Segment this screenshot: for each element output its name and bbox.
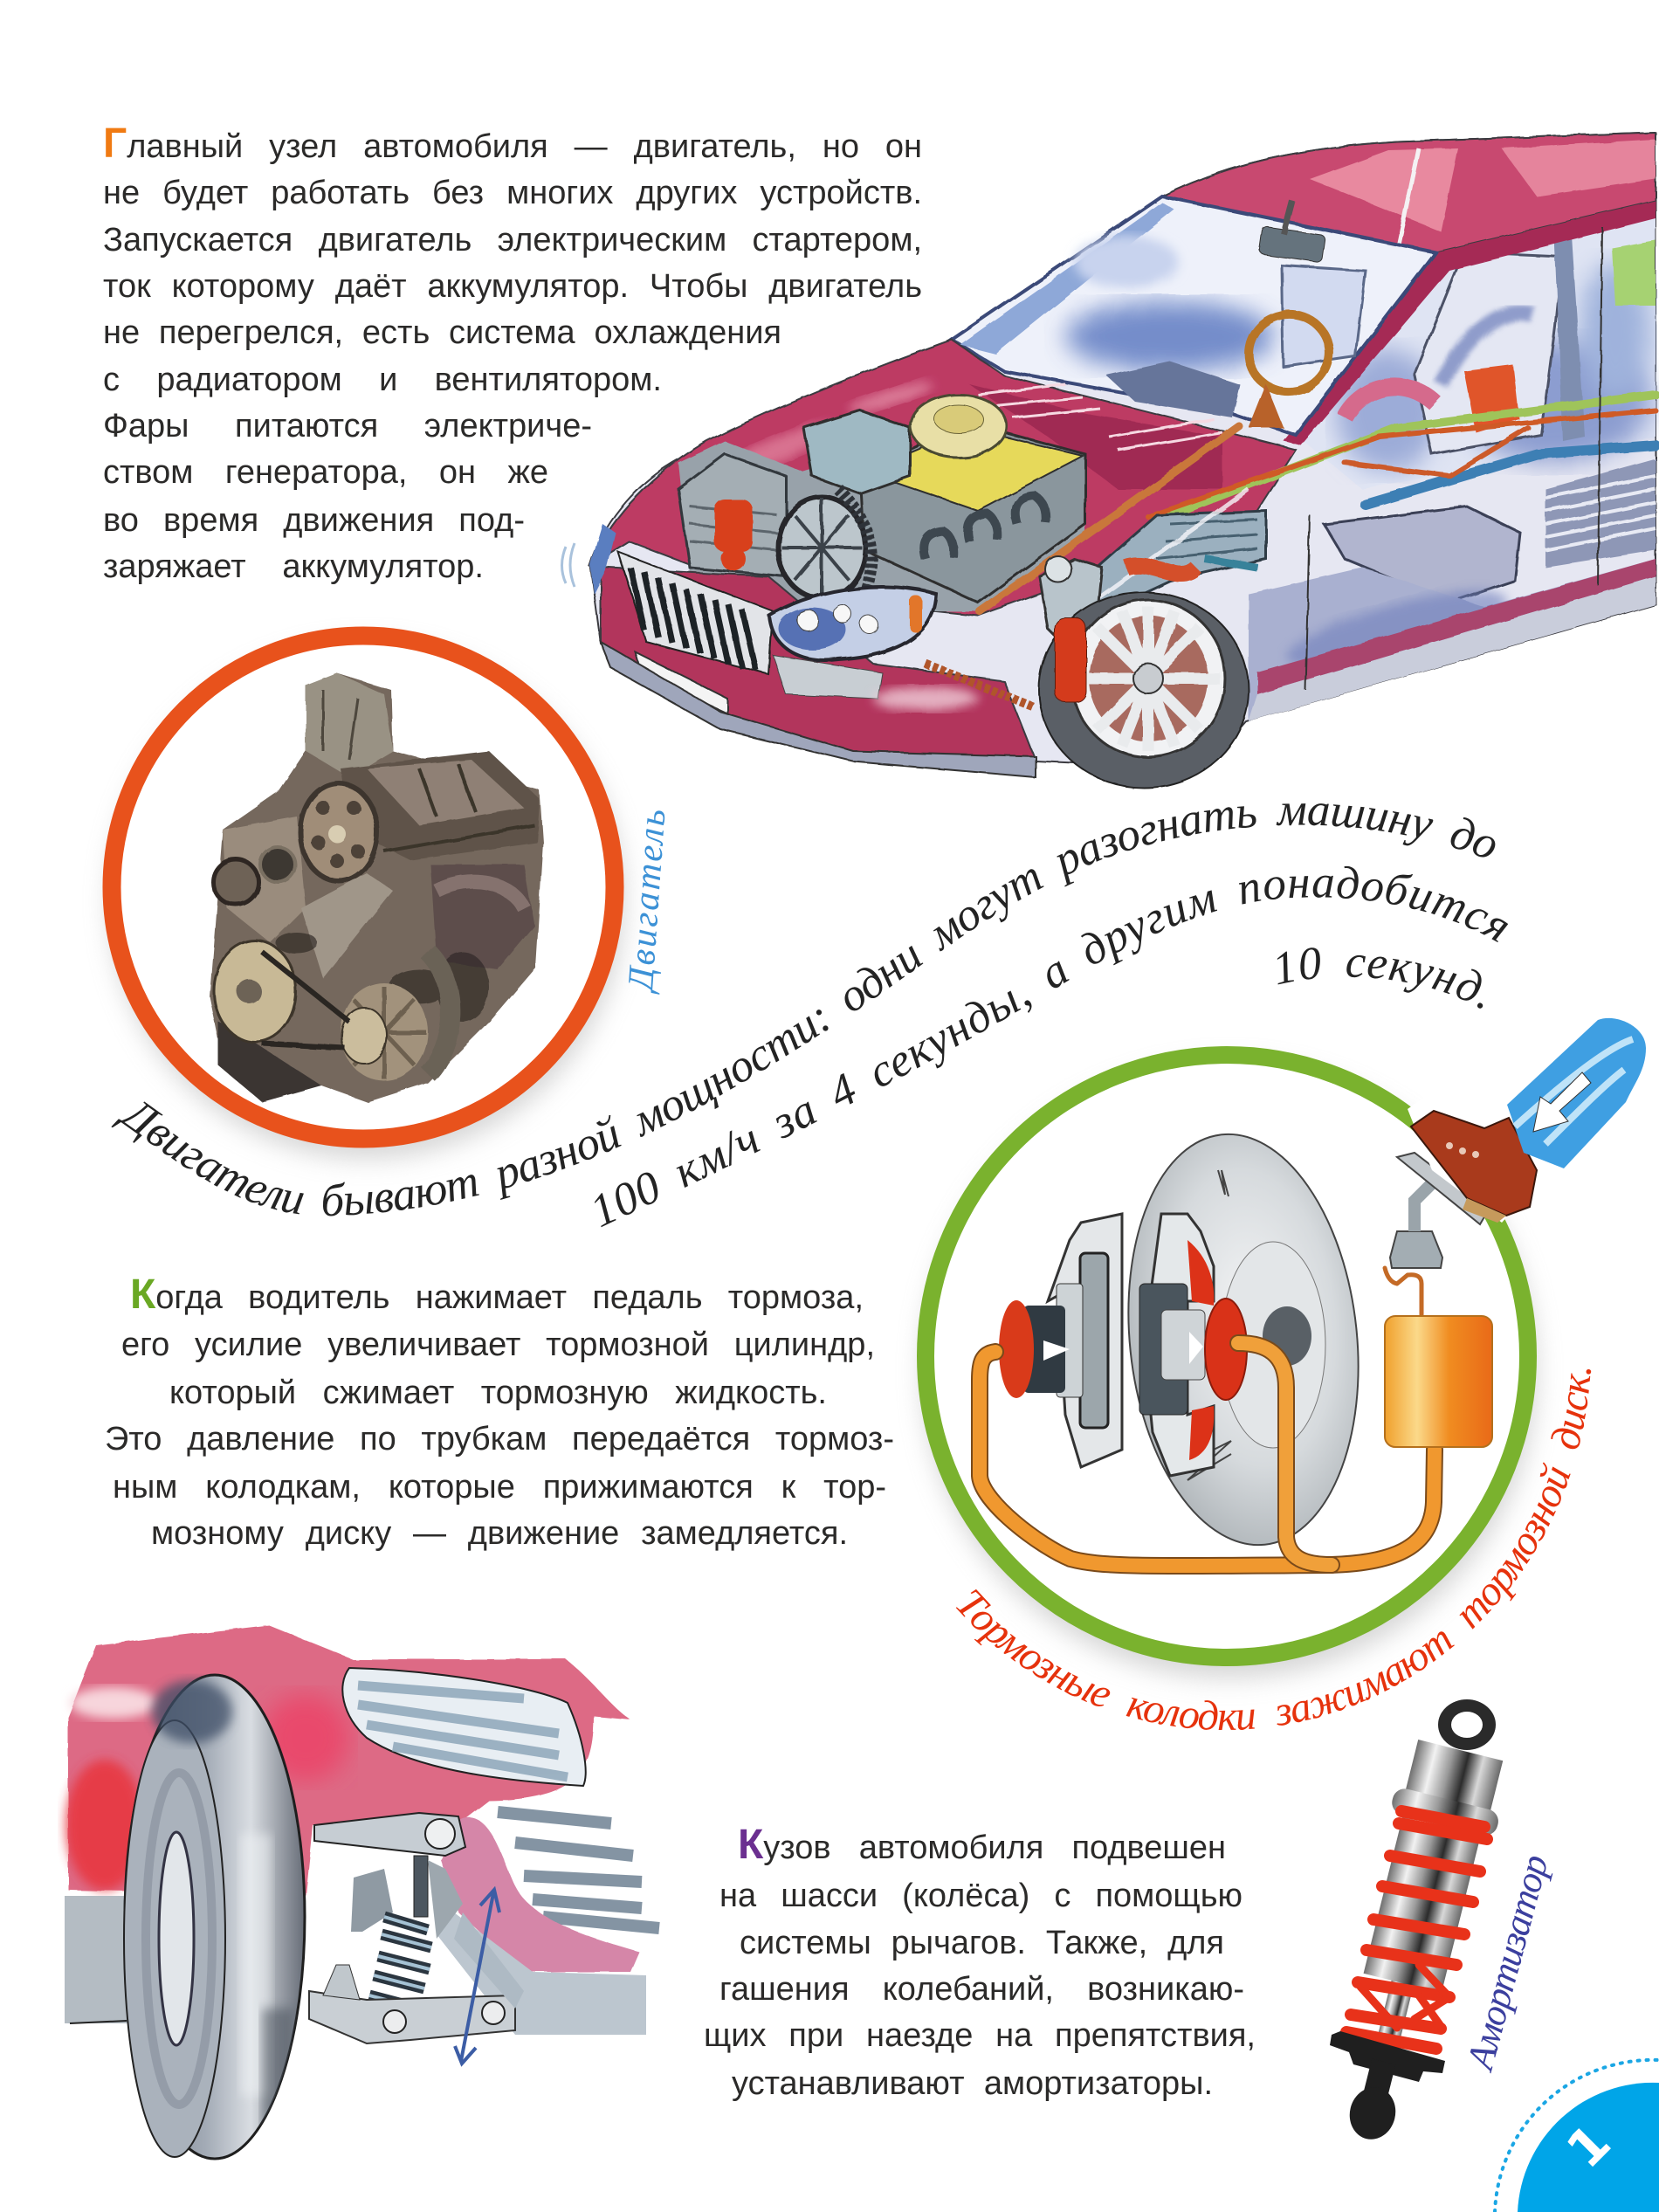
text: заряжает аккумулятор. xyxy=(103,548,484,585)
upper control arm xyxy=(314,1813,465,1856)
text: на шасси (колёса) с помощью xyxy=(719,1878,1243,1914)
text: Кузов автомобиля подвешен xyxy=(738,1822,1226,1868)
text: ным колодкам, которые прижимаются к тор- xyxy=(113,1469,886,1506)
left brake pad assembly xyxy=(999,1253,1108,1428)
caption line 3: 10 секунд. xyxy=(1277,948,1483,1009)
caption line 1: Двигатели бывают разной мощности: одни могут разогнать машину до xyxy=(111,803,1495,1216)
grille, headlight and bumper xyxy=(590,524,1036,777)
engine photo circle xyxy=(109,636,624,1159)
text: мозному диску — движение замедляется. xyxy=(151,1515,848,1552)
front wheel xyxy=(1039,592,1249,788)
text: во время движения под- xyxy=(103,502,525,539)
hydraulic tubing xyxy=(980,1268,1435,1566)
text block: suspension xyxy=(704,1822,1256,2102)
left brake caliper xyxy=(1048,1214,1122,1467)
green ring xyxy=(926,1055,1528,1657)
illustration: shock absorber xyxy=(1330,1699,1513,2144)
side glass and interior xyxy=(1296,201,1656,489)
orange ring xyxy=(112,636,615,1139)
text block: engine intro xyxy=(103,121,922,585)
grey bumper and sill xyxy=(65,1896,646,2035)
label: engine: Двигатель xyxy=(621,808,673,996)
brake fluid reservoir xyxy=(1385,1316,1492,1447)
brake diagram circle xyxy=(922,1018,1646,1678)
black base and knob xyxy=(1330,2031,1445,2144)
front suspension strut xyxy=(926,556,1257,707)
steering wheel xyxy=(1242,307,1336,428)
mounting eye xyxy=(1438,1699,1496,1750)
sound waves xyxy=(562,543,575,587)
windshield and dashboard xyxy=(952,196,1435,435)
text: Запускается двигатель электрическим стартером, xyxy=(103,222,922,258)
label: shock absorber: Амортизатор xyxy=(1458,1850,1557,2076)
engine in bay xyxy=(678,395,1085,611)
right brake caliper with red pads xyxy=(1139,1214,1247,1476)
car body silhouette xyxy=(590,133,1656,768)
lower body and sill xyxy=(1249,227,1656,721)
jeans with pedal arrow xyxy=(1507,1018,1646,1168)
text: ток которому даёт аккумулятор. Чтобы двигатель xyxy=(103,268,922,305)
text: с радиатором и вентилятором. xyxy=(103,362,662,398)
text block: brakes xyxy=(105,1271,894,1552)
front seat cushion xyxy=(1324,506,1520,603)
brake disc xyxy=(1109,1123,1378,1556)
lower grille louvres xyxy=(498,1812,659,1928)
page number: 1 xyxy=(1555,2112,1622,2180)
blue motion arrow xyxy=(455,1890,499,2064)
illustration: front wheel suspension xyxy=(65,1625,659,2159)
roof xyxy=(1162,133,1656,445)
pink lower panel xyxy=(441,1817,639,1972)
lower control arm xyxy=(309,1912,524,2043)
text: Когда водитель нажимает педаль тормоза, xyxy=(130,1271,864,1318)
drive shafts and brake lines xyxy=(980,395,1656,611)
text: Это давление по трубкам передаётся тормоз- xyxy=(105,1421,894,1457)
text: устанавливают амортизаторы. xyxy=(732,2065,1213,2102)
chrome cylinders xyxy=(1336,1737,1513,2051)
text: гашения колебаний, возникаю- xyxy=(719,1971,1244,2008)
hood and fender xyxy=(590,340,1296,616)
foot on pedal xyxy=(1397,1018,1646,1224)
illustration: cutaway car xyxy=(590,133,1656,788)
text: не перегрелся, есть система охлаждения xyxy=(103,314,781,351)
page number badge xyxy=(1495,2060,1659,2212)
text: щих при наезде на препятствия, xyxy=(704,2017,1256,2054)
tyre xyxy=(124,1675,305,2159)
red car body xyxy=(68,1625,630,1895)
text: Главный узел автомобиля — двигатель, но он xyxy=(103,121,922,167)
text: его усилие увеличивает тормозной цилиндр, xyxy=(121,1327,875,1363)
text: системы рычагов. Также, для xyxy=(740,1925,1224,1961)
engine photograph approximation xyxy=(210,673,543,1102)
text: не будет работать без многих других устройств. xyxy=(103,175,922,211)
text: который сжимает тормозную жидкость. xyxy=(169,1375,827,1411)
caption: brake pads: Тормозные колодки зажимают тормозной диск. xyxy=(955,1369,1591,1730)
red coil spring xyxy=(1346,1811,1487,2049)
gearbox xyxy=(1087,489,1266,611)
text: ством генератора, он же xyxy=(103,454,548,491)
headlight glass xyxy=(342,1668,586,1786)
text: Фары питаются электриче- xyxy=(103,408,592,444)
handwritten caption: engine power xyxy=(111,803,1509,1228)
shock strut and spring xyxy=(351,1856,463,2009)
caption line 2: 100 км/ч за 4 секунды, а другим понадобится xyxy=(595,866,1509,1228)
master cylinder xyxy=(1390,1183,1442,1268)
